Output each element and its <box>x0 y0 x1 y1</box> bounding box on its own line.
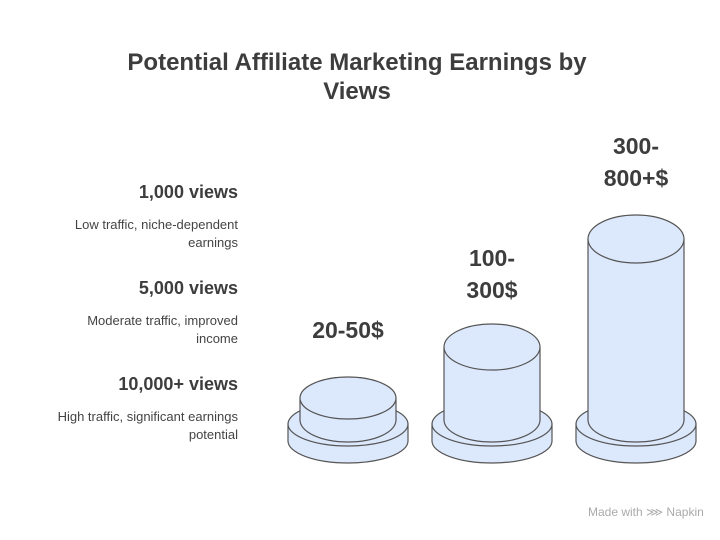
desc: 10,000+ views: potential <box>189 427 238 442</box>
value: 100-300$ <box>466 245 518 303</box>
title: Potential Affiliate Marketing Earnings by <box>127 49 587 76</box>
value: 300-800+$ <box>604 133 668 191</box>
desc: 1,000 views: earnings <box>188 235 238 250</box>
value: 300-800+$: 300- <box>613 133 659 159</box>
desc: 10,000+ views <box>58 409 238 442</box>
value: 100-300$: 300$ <box>466 277 518 303</box>
desc: 1,000 views: Low traffic, niche-dependent <box>75 217 238 232</box>
title: Views <box>323 78 391 105</box>
label: 5,000 views: 5,000 views <box>139 278 238 298</box>
title <box>127 49 587 105</box>
desc: 1,000 views <box>75 217 238 250</box>
desc: 5,000 views: Moderate traffic, improved <box>87 313 238 328</box>
cylinder: 300-800+$ <box>576 215 696 463</box>
desc: 5,000 views: income <box>196 331 238 346</box>
footer: Made with Napkin: Made with ⋙ Napkin <box>588 505 704 519</box>
value: 20-50$: 20-50$ <box>312 317 384 343</box>
cylinder: 20-50$ <box>288 377 408 463</box>
cylinder: 100-300$ <box>432 324 552 463</box>
desc: 5,000 views <box>87 313 238 346</box>
label: 10,000+ views: 10,000+ views <box>118 374 238 394</box>
desc: 10,000+ views: High traffic, significant earnings <box>58 409 238 424</box>
value: 100-300$: 100- <box>469 245 515 271</box>
value: 300-800+$: 800+$ <box>604 165 668 191</box>
label: 1,000 views: 1,000 views <box>139 182 238 202</box>
